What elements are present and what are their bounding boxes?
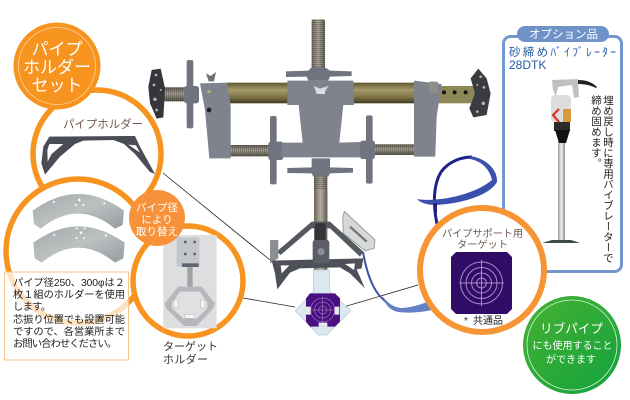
icon: target holder bbox=[163, 235, 217, 328]
panel: pipe holder circle bbox=[33, 90, 161, 218]
wing nuts bbox=[206, 72, 438, 112]
circle badge: switch by pipe diameter: パイプ径 bbox=[136, 201, 178, 214]
ribbon: blue strap bbox=[363, 156, 497, 313]
circle badge: switch by pipe diameter bbox=[129, 190, 185, 246]
icon: target bbox=[451, 252, 512, 314]
circle badge: pipe holder set: ホルダー bbox=[23, 58, 91, 77]
panel: target holder circle bbox=[133, 226, 243, 336]
icon: vibrator bbox=[542, 79, 597, 243]
rod end bbox=[314, 190, 327, 222]
holder arch bbox=[272, 258, 365, 289]
frame arms bbox=[277, 222, 363, 257]
text block: holder note: お問い合わせください。 bbox=[13, 337, 117, 350]
text block: holder note: 枚１組のホルダーを使用 bbox=[13, 288, 125, 301]
circle badge: pipe holder set: セット bbox=[32, 76, 82, 95]
top screw rod bbox=[312, 19, 325, 73]
panel: option product: 28DTK bbox=[509, 58, 546, 72]
label: common part: 共通品 bbox=[473, 315, 503, 327]
main tube bbox=[227, 83, 417, 103]
panel: option product: オプション品 bbox=[529, 28, 598, 41]
circle badge: switch by pipe diameter: 取り替え bbox=[136, 225, 178, 238]
illustration: lower frame and target bbox=[270, 190, 375, 335]
label: target holder: ターゲット bbox=[163, 340, 218, 353]
circle badge: pipe holder set: パイプ bbox=[32, 40, 82, 59]
text block: holder note: します。 bbox=[13, 301, 51, 313]
label: common part: * bbox=[464, 316, 468, 327]
label: target holder: ホルダー bbox=[163, 352, 208, 366]
vertical text: 埋め戻し時に専用バイブレーターで bbox=[602, 95, 614, 263]
panel: option product bbox=[504, 26, 622, 272]
lower screw rod bbox=[314, 173, 327, 277]
right pipe bbox=[437, 86, 480, 103]
tab: option bbox=[517, 26, 609, 42]
text block: holder note: ですので、各営業所まで bbox=[13, 325, 125, 338]
hub bbox=[313, 223, 329, 263]
clip bbox=[343, 211, 375, 251]
label: target for pipe support: パイプサポート用 bbox=[442, 228, 523, 240]
circle badge: ribbed pipe bbox=[523, 296, 621, 394]
label: pipe holder: パイプホルダー bbox=[63, 117, 143, 131]
panel: option product: 締め固めます。 bbox=[590, 94, 602, 168]
circle badge: ribbed pipe: ができます bbox=[546, 353, 596, 366]
target holder body bbox=[295, 270, 351, 335]
circle badge: ribbed pipe: にも使用すること bbox=[532, 339, 612, 352]
panel: holder plates circle bbox=[6, 179, 150, 323]
text block: holder note bbox=[4, 272, 128, 360]
panel: target circle: ターゲット bbox=[457, 239, 508, 251]
text block: holder note: 芯振り位置でも設置可能 bbox=[13, 313, 125, 326]
icon: two curved plates bbox=[33, 194, 125, 263]
left screw bbox=[157, 87, 193, 101]
center clamp bbox=[282, 81, 360, 157]
circle badge: pipe holder set bbox=[14, 22, 100, 110]
product name: 砂締めﾊﾞｲﾌﾞﾚｰﾀｰ bbox=[509, 45, 616, 59]
circle badge: ribbed pipe: リブパイプ bbox=[540, 321, 603, 336]
leader lines bbox=[163, 173, 418, 308]
illustration: pipe centering device bbox=[148, 19, 491, 277]
text block: holder note: パイプ径250、300φは２ bbox=[13, 276, 125, 289]
T handles bbox=[184, 60, 375, 184]
label: target holder bbox=[163, 340, 218, 366]
side post bbox=[270, 240, 278, 263]
left end plate bbox=[148, 69, 165, 119]
lower screws bbox=[228, 144, 417, 156]
side clamps bbox=[200, 81, 442, 158]
right end plate bbox=[469, 69, 491, 117]
icon: pipe holder part bbox=[41, 136, 155, 175]
panel: target circle bbox=[420, 208, 544, 332]
circle badge: switch by pipe diameter: により bbox=[141, 214, 173, 226]
purple target bbox=[306, 293, 340, 327]
